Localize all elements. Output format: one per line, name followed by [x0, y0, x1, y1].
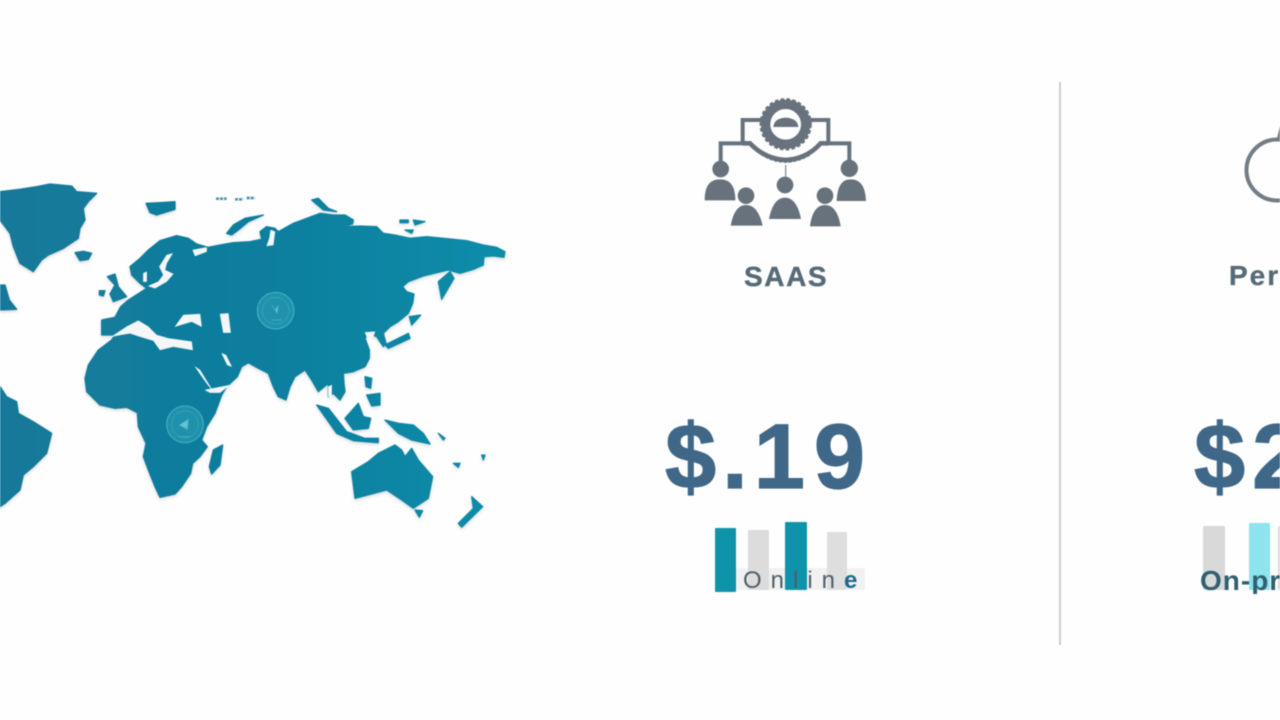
icon: SaaS network of users [704, 98, 867, 228]
landmass: Southeast Asia islands [317, 220, 485, 467]
people [705, 160, 866, 226]
map marker: Africa [167, 406, 203, 443]
central head [773, 118, 798, 127]
inland seas [112, 230, 375, 397]
landmass: Australia [352, 445, 433, 508]
bar 2 [1249, 523, 1270, 590]
map marker: Asia [257, 292, 294, 329]
bar label: Online: Online [743, 567, 857, 594]
landmass: Iceland [75, 251, 92, 261]
landmass: Eurasia and Africa [85, 213, 505, 497]
landmass: Franz Josef Land [312, 198, 337, 212]
bar 3 [1278, 526, 1280, 590]
landmass: New Zealand [458, 497, 483, 527]
landmass: South America [0, 387, 52, 507]
landmass: North America fragment [0, 285, 17, 310]
label backing band [735, 568, 865, 590]
landmass: Tasmania [415, 510, 423, 517]
bar chart: SaaS [714, 521, 865, 594]
bar 1 [1203, 526, 1225, 590]
world map [0, 182, 506, 530]
landmass: Novaya Zemlya [227, 215, 263, 235]
bar 1 [715, 528, 736, 592]
connector lines [721, 120, 849, 177]
heading: SAAS: SAAS [744, 261, 828, 292]
bar 2 [748, 530, 769, 590]
bar chart: Perpetual [1200, 522, 1280, 595]
gear ring [760, 99, 811, 150]
landmass: Svalbard [146, 202, 175, 215]
landmass: Japan and Sakhalin [385, 272, 454, 348]
divider [1059, 82, 1061, 645]
icon: perpetual license [1244, 126, 1280, 204]
price: SaaS: $.19 [665, 406, 871, 508]
landmass: Greenland [0, 184, 97, 272]
landmass: Madagascar [209, 445, 223, 474]
bar 3 [785, 522, 807, 590]
landmass: Great Britain [99, 274, 127, 302]
bar 4 [827, 532, 847, 590]
arctic specks [216, 198, 255, 199]
